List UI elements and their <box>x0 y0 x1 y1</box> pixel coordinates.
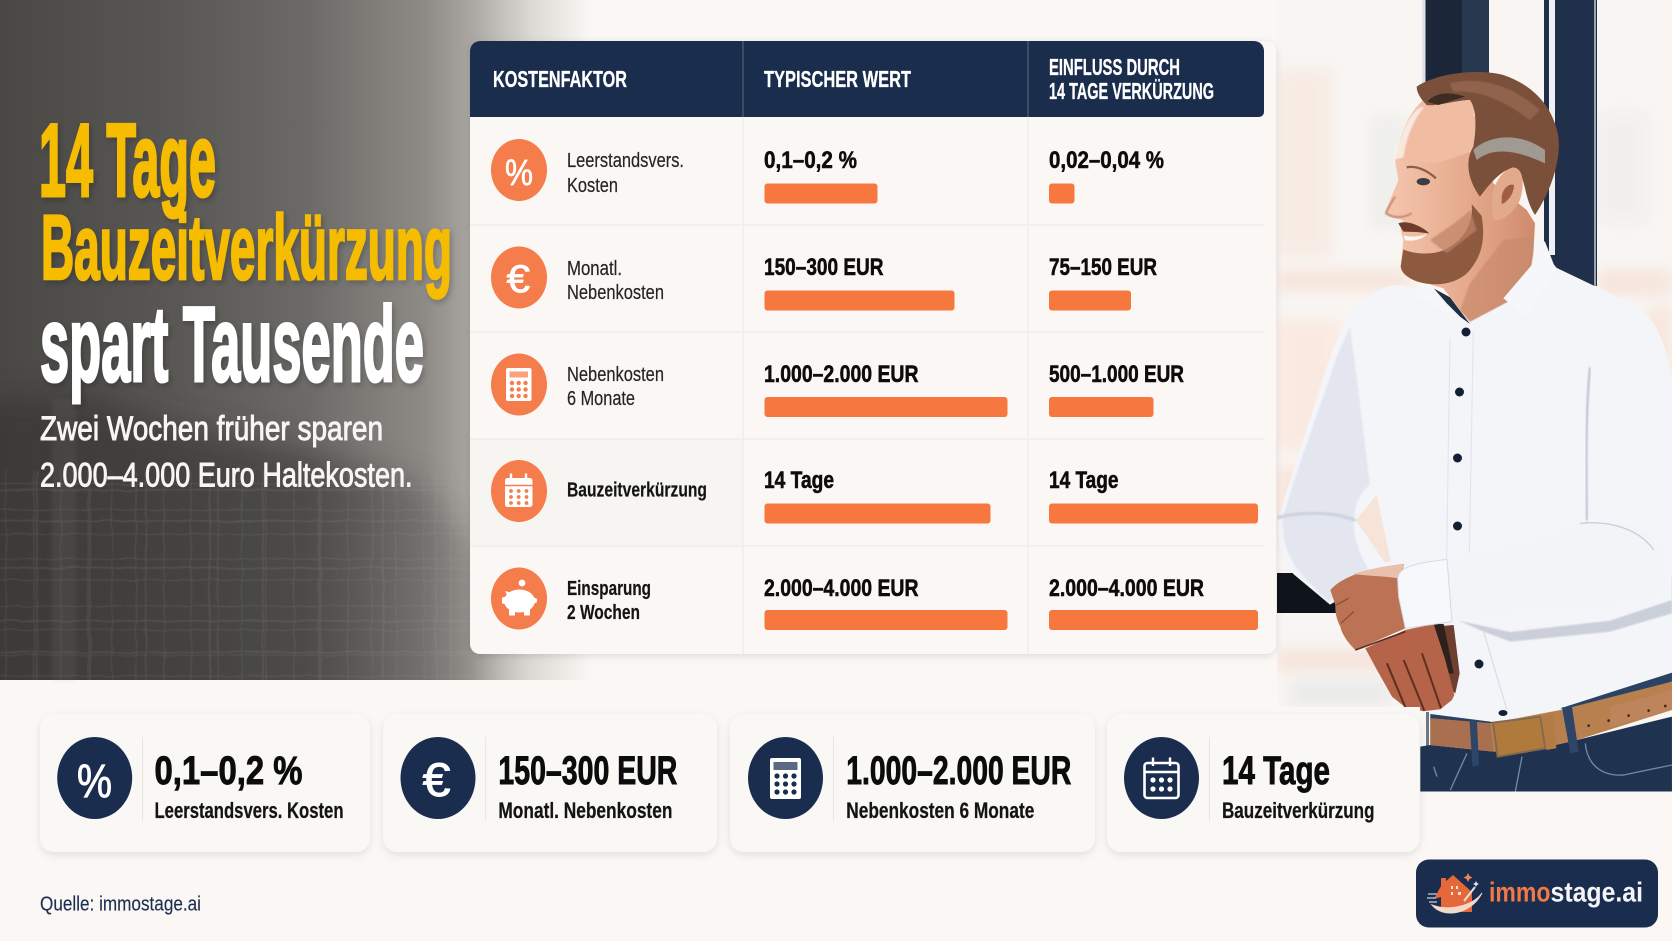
icon: percent <box>57 737 132 819</box>
row: Einsparung 2 Wochen: 2.000–4.000 EUR <box>764 575 918 602</box>
logo: immostage.ai: immo <box>1489 876 1550 908</box>
row: Leerstandsvers. Kosten: Leerstandsvers. <box>567 150 684 172</box>
logo: immostage.ai <box>1416 860 1658 928</box>
hair <box>1417 72 1559 215</box>
icon: house with swoosh <box>1427 873 1482 913</box>
row: Leerstandsvers. Kosten: 0,1–0,2 % <box>764 147 857 174</box>
photo: man at window <box>1277 0 1672 800</box>
subtitle: Zwei Wochen früher sparen <box>40 410 383 448</box>
stat card: Nebenkosten 6 Monate: Nebenkosten 6 Monate <box>846 798 1034 823</box>
table body panel <box>470 41 1276 654</box>
row: Monatl. Nebenkosten: 75–150 EUR <box>1049 254 1157 281</box>
icon: calendar <box>491 460 547 522</box>
beard <box>1401 204 1483 284</box>
icon: calculator <box>748 737 823 819</box>
stat card: Bauzeitverkürzung: 14 Tage <box>1222 749 1330 793</box>
row: Bauzeitverkürzung <box>491 460 1258 524</box>
row: Nebenkosten 6 Monate: 1.000–2.000 EUR <box>764 361 918 388</box>
row: Leerstandsvers. Kosten <box>491 139 1164 204</box>
infographic canvas: Bauzeitverkürzung <box>41 197 452 299</box>
icon: calculator <box>491 354 547 416</box>
row: Nebenkosten 6 Monate: 6 Monate <box>567 388 635 410</box>
logo: immostage.ai: stage.ai <box>1550 876 1643 908</box>
icon: piggy bank <box>491 568 547 630</box>
collar <box>1503 238 1554 302</box>
row: Nebenkosten 6 Monate: 500–1.000 EUR <box>1049 361 1184 388</box>
row: Monatl. Nebenkosten: Monatl. <box>567 258 622 280</box>
table header: 14 TAGE VERKÜRZUNG <box>1049 78 1214 104</box>
icon: percent: % <box>505 152 533 193</box>
belt <box>1430 673 1672 767</box>
row: Bauzeitverkürzung: 14 Tage <box>764 467 834 494</box>
icon: euro: € <box>506 258 530 301</box>
stat card: Monatl. Nebenkosten <box>383 714 717 852</box>
stat card: Bauzeitverkürzung: Bauzeitverkürzung <box>1222 798 1374 823</box>
buttons <box>1453 328 1508 716</box>
stat card: Leerstandsvers. Kosten: Leerstandsvers. Kosten <box>154 798 344 823</box>
icon: percent <box>491 139 547 201</box>
window background <box>1277 68 1672 707</box>
table header: EINFLUSS DURCH <box>1049 54 1180 80</box>
row: Monatl. Nebenkosten: 150–300 EUR <box>764 254 884 281</box>
row: Einsparung 2 Wochen: 2.000–4.000 EUR <box>1049 575 1204 602</box>
row: Nebenkosten 6 Monate <box>491 354 1184 417</box>
row: Monatl. Nebenkosten <box>491 246 1157 310</box>
hands <box>1330 564 1460 711</box>
jeans <box>1420 717 1672 793</box>
title <box>39 103 452 404</box>
row: Einsparung 2 Wochen: 2 Wochen <box>567 602 640 624</box>
source note: Quelle: immostage.ai <box>40 894 201 916</box>
row: Bauzeitverkürzung: Bauzeitverkürzung <box>567 480 707 502</box>
icon: euro <box>491 246 547 308</box>
row: Einsparung 2 Wochen <box>491 568 1258 630</box>
row: Einsparung 2 Wochen: Einsparung <box>567 578 651 600</box>
icon: euro <box>400 737 476 819</box>
row: Leerstandsvers. Kosten: Kosten <box>567 175 618 197</box>
table header: KOSTENFAKTOR <box>493 66 627 92</box>
eye and brow <box>1417 178 1430 185</box>
row: Nebenkosten 6 Monate: Nebenkosten <box>567 364 664 386</box>
icon: percent: % <box>77 754 112 807</box>
stat card: Nebenkosten 6 Monate: 1.000–2.000 EUR <box>846 749 1071 793</box>
subtitle <box>40 410 412 494</box>
window frames <box>1277 0 1672 752</box>
row: Monatl. Nebenkosten: Nebenkosten <box>567 282 664 304</box>
shirt <box>1277 240 1672 720</box>
table header: TYPISCHER WERT <box>764 66 911 92</box>
row: Leerstandsvers. Kosten: 0,02–0,04 % <box>1049 147 1164 174</box>
comparison table <box>470 41 1276 654</box>
icon: euro: € <box>422 753 450 806</box>
stat card: Leerstandsvers. Kosten <box>40 714 370 852</box>
table header <box>470 41 1264 117</box>
icon: calendar <box>1124 737 1199 819</box>
stat card: Monatl. Nebenkosten: 150–300 EUR <box>498 749 677 793</box>
ear <box>1491 167 1523 220</box>
stat card: Leerstandsvers. Kosten: 0,1–0,2 % <box>154 749 302 793</box>
stat card: Monatl. Nebenkosten: Monatl. Nebenkosten <box>498 798 672 823</box>
subtitle: 2.000–4.000 Euro Haltekosten. <box>40 456 412 494</box>
title: spart Tausende <box>40 284 424 404</box>
shirt cuff <box>1398 559 1452 628</box>
stat card: Bauzeitverkürzung <box>1107 714 1420 852</box>
neck and face <box>1386 116 1535 322</box>
elbow gap <box>1356 495 1391 563</box>
row: Bauzeitverkürzung: 14 Tage <box>1049 467 1118 494</box>
head <box>1386 72 1559 324</box>
stat card: Nebenkosten 6 Monate <box>730 714 1095 852</box>
forearm <box>1468 554 1470 556</box>
title: 14 Tage <box>39 103 216 219</box>
background: construction site photo <box>0 0 590 720</box>
